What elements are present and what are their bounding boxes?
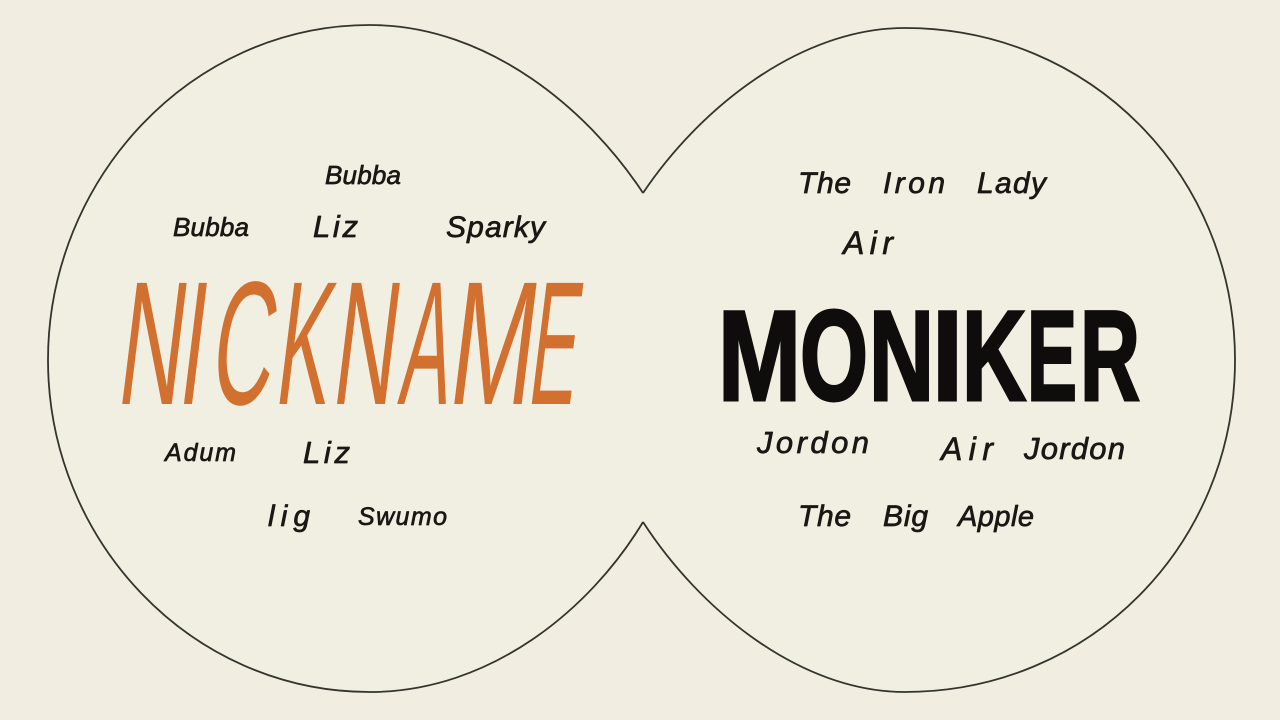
example: Air Jordon: Jordon — [1023, 431, 1125, 466]
example: Adum: Adum — [163, 439, 236, 467]
example: Bubba top: Bubba — [325, 160, 401, 190]
heading: MONIKER: N — [869, 285, 934, 428]
example: Liz lower: Liz — [303, 435, 350, 470]
heading: MONIKER: I — [932, 285, 963, 428]
panel: moniker examples and heading — [718, 167, 1140, 533]
panel: nickname examples and heading — [110, 160, 592, 533]
example: The Big Apple: Big — [883, 500, 928, 533]
heading: MONIKER: R — [1080, 285, 1140, 428]
example: The Iron Lady: Lady — [977, 167, 1048, 200]
heading: NICKNAME: K — [268, 246, 345, 442]
example: The Iron Lady — [798, 167, 1048, 200]
heading: NICKNAME: E — [521, 246, 592, 442]
heading: NICKNAME: N — [325, 246, 411, 442]
example: Bubba: Bubba — [173, 212, 249, 242]
example: The Big Apple: The — [798, 500, 851, 533]
example: Swumo: Swumo — [358, 503, 447, 531]
heading: MONIKER: K — [962, 285, 1026, 428]
heading: MONIKER: E — [1027, 285, 1077, 428]
example: The Big Apple — [798, 500, 1034, 533]
example: The Iron Lady: The — [798, 167, 851, 200]
example: The Iron Lady: Iron — [883, 167, 945, 200]
heading: NICKNAME: C — [203, 246, 288, 442]
heading: NICKNAME: N — [110, 246, 198, 442]
example: Jordon: Jordon — [756, 425, 869, 460]
example: Air Jordon: Air — [939, 431, 994, 467]
heading: NICKNAME: A — [392, 246, 466, 442]
panel: left lobe outline — [48, 25, 643, 692]
example: Liz: Liz — [313, 209, 358, 244]
example: Air Jordon — [939, 431, 1125, 467]
example: The Big Apple: Apple — [956, 501, 1034, 533]
example: lig: lig — [268, 500, 310, 533]
heading: MONIKER: M — [718, 285, 801, 428]
heading: NICKNAME: I — [171, 246, 219, 442]
heading: MONIKER: O — [800, 285, 868, 428]
example: Air: Air — [841, 225, 894, 261]
example: Sparky: Sparky — [446, 211, 547, 244]
heading: NICKNAME: M — [441, 246, 549, 442]
panel: right lobe outline — [643, 28, 1235, 692]
